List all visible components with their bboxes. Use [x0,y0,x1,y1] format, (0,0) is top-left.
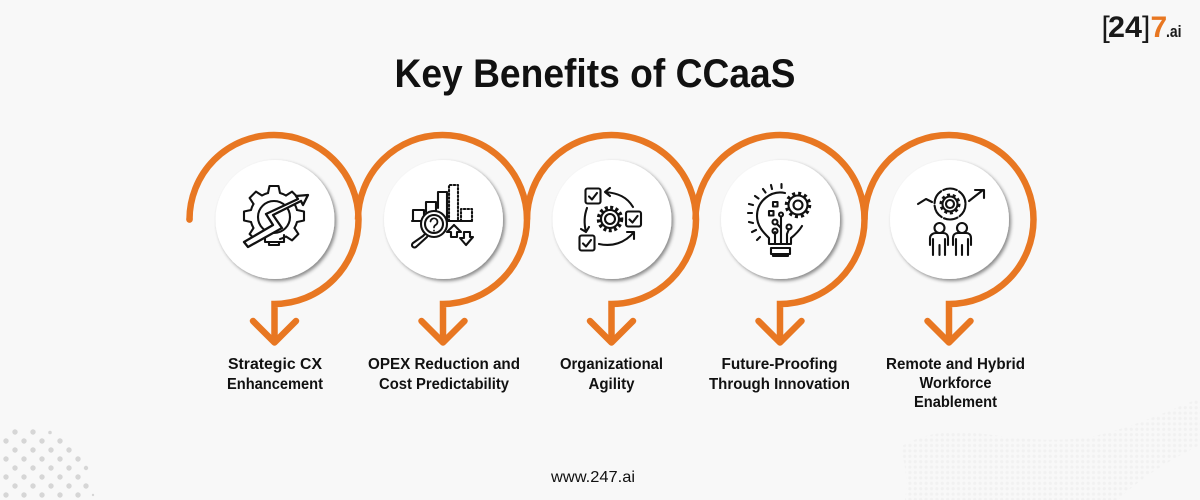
logo: 24 [1108,11,1142,44]
white circle 4 [721,160,840,279]
label 3: Organizational [560,356,663,373]
label 3 [560,356,663,393]
decorative wave pattern bottom right [900,398,1200,500]
label 1 [227,356,323,393]
website url: www.247.ai [550,469,635,486]
arrow 3 [527,135,696,342]
arrow 4 [696,135,864,342]
label 4: Through Innovation [709,376,850,393]
benefit 5: Remote and Hybrid Workforce Enablement [864,135,1034,411]
logo: ] [1142,11,1150,44]
logo: .ai [1166,22,1182,41]
label 1: Enhancement [227,376,323,393]
icon: agile cycle [580,188,641,250]
label 4 [709,356,850,393]
decorative dot pattern bottom left [3,429,94,498]
icon: bulb with gear and circuit [748,184,810,256]
label 5: Remote and Hybrid [886,356,1025,373]
arrow 2 [358,135,527,342]
arrow 1 [190,135,358,342]
benefit 4: Future-Proofing Through Innovation [696,135,864,393]
logo [1102,11,1182,44]
icon: chart and magnifier [412,185,473,248]
benefit 1: Strategic CX Enhancement [190,135,358,393]
logo: 7 [1150,11,1167,44]
white circle 1 [216,160,334,279]
benefit 2: OPEX Reduction and Cost Predictability [358,135,527,393]
label 4: Future-Proofing [722,356,838,373]
icon: workforce and gear [918,188,984,255]
label 5: Enablement [914,394,997,411]
label 5: Workforce [920,375,992,392]
title: Key Benefits of CCaaS [394,52,796,96]
white circle 5 [890,160,1009,279]
white circle 3 [552,160,672,279]
icon: gear with arrow [244,186,308,247]
white circle 2 [384,160,503,279]
label 2 [368,356,520,393]
arrow 5 [864,135,1034,342]
benefit 3: Organizational Agility [527,135,696,393]
label 1: Strategic CX [228,356,323,373]
label 2: Cost Predictability [379,376,509,393]
label 2: OPEX Reduction and [368,356,520,373]
logo: [ [1102,11,1110,44]
label 5 [886,356,1025,411]
label 3: Agility [588,376,635,393]
